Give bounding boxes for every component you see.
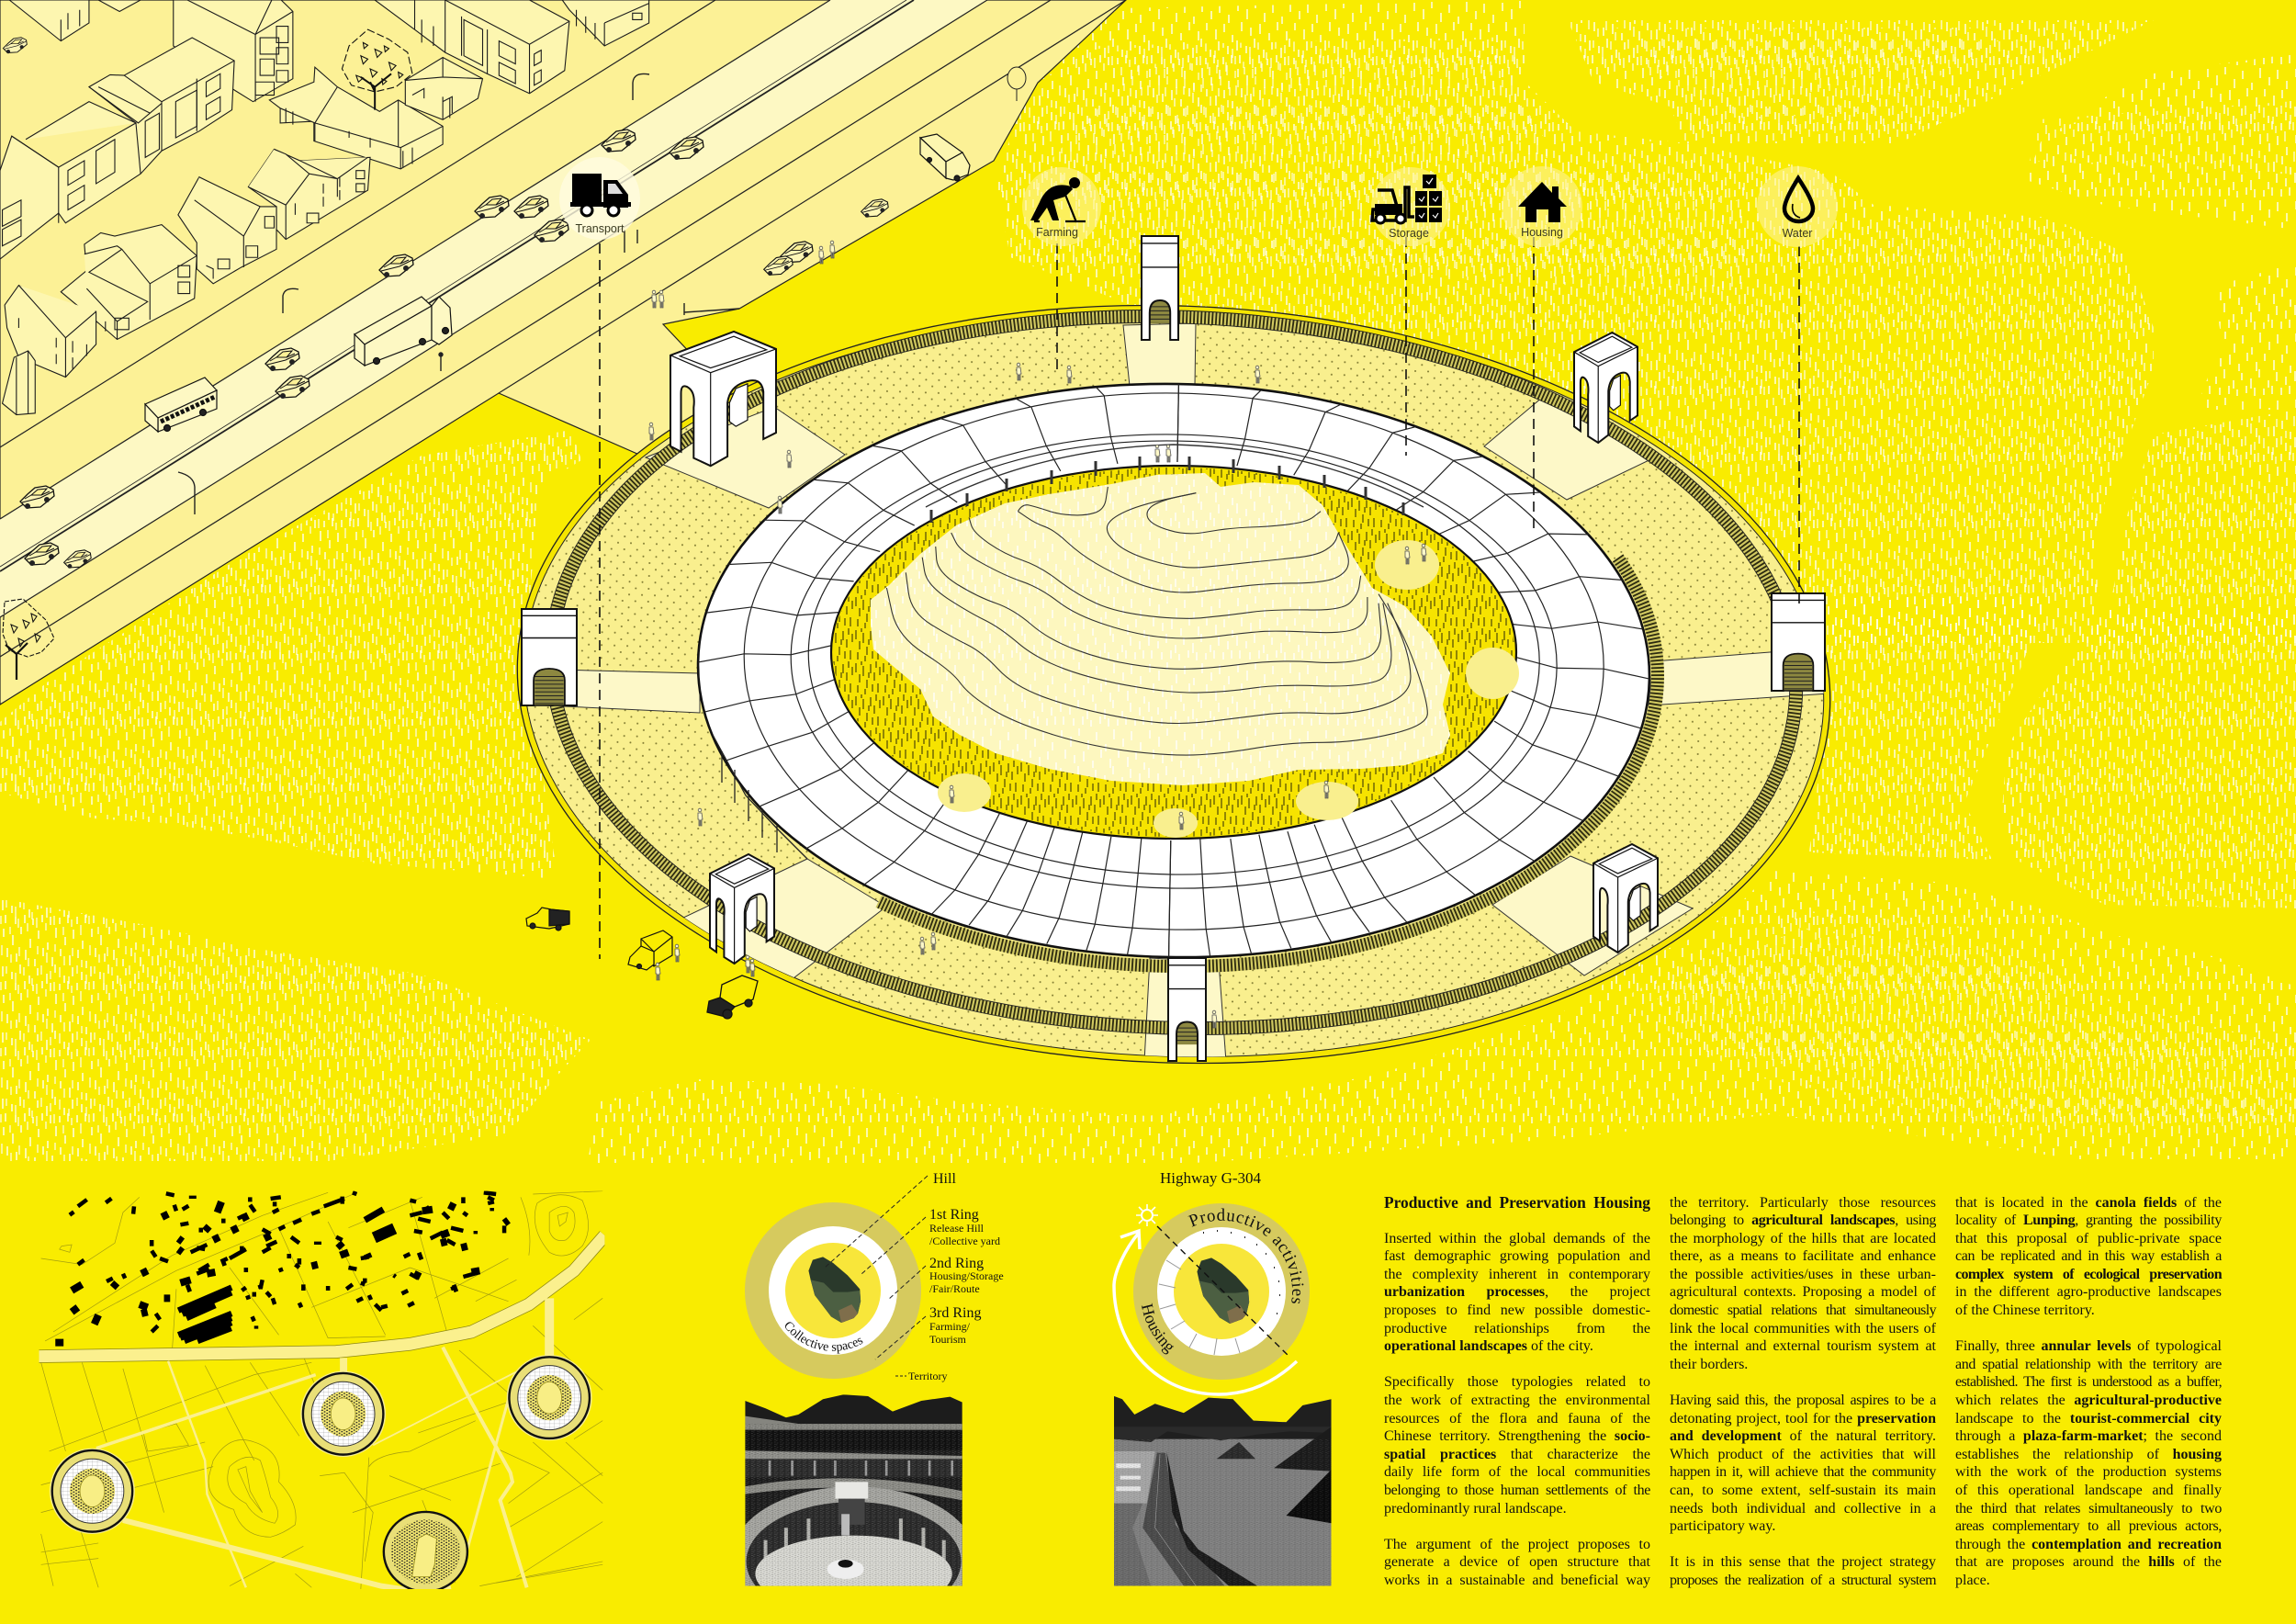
ring diagram: collective: [745, 1176, 928, 1379]
text column 3: that is located in the canola fields of the: [1955, 1194, 2222, 1211]
text column 2: proposes the realization of a structural system: [1670, 1573, 1936, 1588]
plazas between the fields: [523, 323, 1829, 1062]
meadow clearings: [938, 540, 1519, 838]
white grass field: central and upper area: [996, 0, 2296, 908]
ring diagram labels: 3rd Ring: [929, 1305, 981, 1321]
icon: storage: [1371, 167, 1450, 246]
text column 2: agricultural contexts. Proposing a model of: [1670, 1284, 1936, 1300]
arch gate: top: [1142, 236, 1178, 340]
text column 1: spatial practices that characterize the: [1384, 1447, 1650, 1462]
hatched outer ring site: [504, 283, 1843, 1086]
icon: water: [1757, 166, 1838, 247]
text column 1: resources of the flora and fauna of the: [1384, 1411, 1650, 1427]
text column 2: participatory way.: [1670, 1518, 1775, 1534]
arch gate: bottom right: [1593, 844, 1658, 953]
arch gate: left: [522, 609, 577, 705]
map buildings: [55, 1192, 509, 1343]
text column 3: locality of Lunping, granting the possibility: [1955, 1212, 2222, 1228]
photo: highway through karst valley: [1114, 1393, 1332, 1586]
text column 1: urbanization processes, the project: [1384, 1284, 1650, 1300]
field workers: [656, 944, 755, 980]
text column 3: areas complementary to all previous actors,: [1955, 1518, 2222, 1534]
pickup truck in the field: [526, 908, 569, 930]
ring diagram labels: Housing/Storage: [929, 1269, 1004, 1282]
icon: housing: [1502, 166, 1582, 247]
text column 2: Having said this, the proposal aspires to be a: [1670, 1393, 1936, 1408]
text column 2: Which product of the activities that will: [1670, 1447, 1936, 1462]
text column 1: predominantly rural landscape.: [1384, 1501, 1567, 1517]
text column 2: happen in it, will achieve that the community: [1670, 1464, 1936, 1480]
tree: small far: [1007, 67, 1026, 101]
yellow notch field figures: [652, 241, 835, 308]
row of houses: [0, 0, 649, 415]
map street network: [41, 1191, 602, 1589]
harvester: [707, 976, 758, 1019]
text column 3: complex system of ecological preservation: [1955, 1267, 2222, 1282]
text column 2: needs both individual and collective in a: [1670, 1501, 1936, 1517]
text column 3: establishes the relationship of housing: [1955, 1447, 2222, 1462]
hatched path ring: [533, 288, 1815, 1056]
text column 3: can be replicated and in this way establish a: [1955, 1248, 2222, 1264]
text column 1: operational landscapes of the city.: [1384, 1338, 1593, 1354]
icon: transport: Transport: [575, 222, 625, 235]
text column 1: productive relationships from the: [1384, 1321, 1650, 1336]
text column 3: the third that relates simultaneously to two: [1955, 1501, 2222, 1517]
white grass field: left: [0, 430, 591, 1161]
site plan map: [39, 1191, 604, 1593]
ring diagram labels: /Fair/Route: [929, 1282, 980, 1295]
text column 2: there, as a means to facilitate and enhance: [1670, 1248, 1936, 1264]
text column 2: the internal and external tourism system at: [1670, 1338, 1936, 1354]
ring diagram labels: 1st Ring: [929, 1207, 979, 1223]
meadow grass strokes: [833, 468, 1514, 837]
arch gate: top right: [1574, 333, 1638, 443]
roof panel divisions: [1169, 384, 1654, 965]
hill contour lines: [886, 487, 1427, 755]
icon: transport: [559, 157, 640, 240]
ring diagram labels: Farming/: [929, 1320, 971, 1333]
text column 3: of this operational landscape and finally: [1955, 1483, 2222, 1498]
text column 3: of the Chinese territory.: [1955, 1303, 2095, 1318]
text column 1: [1384, 1192, 1650, 1588]
ring diagram: productive: Productive activities: [1188, 1209, 1304, 1303]
neighbourhood ground plane: [0, 0, 1126, 705]
ring diagram labels: [895, 1171, 1004, 1382]
icon: storage: Storage: [1389, 227, 1429, 240]
bus: [145, 378, 217, 432]
text column 1: daily life form of the local communities: [1384, 1464, 1650, 1480]
text column 3: Finally, three annular levels of typological: [1955, 1338, 2222, 1354]
text column 3: through the contemplation and recreation: [1955, 1537, 2222, 1552]
text column 2: domestic spatial relations that simultaneously: [1670, 1303, 1936, 1318]
text column 3: through a plaza-farm-market; the second: [1955, 1428, 2222, 1444]
photo: round earthen building: [745, 1394, 962, 1586]
highway label: Highway G-304: [1160, 1169, 1262, 1187]
text column 2: their borders.: [1670, 1357, 1748, 1372]
text column 3: landscape to the tourist-commercial city: [1955, 1411, 2222, 1427]
street lamps: [178, 73, 739, 514]
arch gate: bottom: [1168, 958, 1206, 1061]
text column 2: link the local communities with the users of: [1670, 1321, 1936, 1336]
text column 2: can, to some extent, self-sustain its main: [1670, 1483, 1936, 1498]
roof eaves and columns: [926, 445, 1424, 523]
icon: water: Water: [1783, 227, 1812, 240]
text column 1: works in a sustainable and beneficial way: [1384, 1573, 1650, 1588]
inner hatched path under roof edge: [877, 545, 1660, 975]
text column 3: which relates the agricultural-productive: [1955, 1393, 2222, 1408]
tree: courtyard: [342, 29, 412, 110]
text column 1: Chinese territory. Strengthening the socio-: [1384, 1428, 1650, 1444]
tree: left edge: [3, 599, 54, 680]
arch gate: right: [1772, 593, 1825, 691]
text column 2: the morphology of the hills that are located: [1670, 1231, 1936, 1246]
white grass field: lower right and bottom: [588, 871, 2296, 1163]
ring diagram labels: /Collective yard: [929, 1235, 1000, 1247]
semi truck: [355, 297, 452, 366]
text column 1: belonging to those human settlements of the: [1384, 1483, 1650, 1498]
hill grass: [871, 473, 1450, 785]
text column 1: generate a device of open structure that: [1384, 1554, 1650, 1570]
text column 3: and spatial relationship with the territory are: [1955, 1357, 2222, 1372]
delivery truck by the road: [920, 134, 970, 181]
delivery truck in the field: [628, 930, 672, 970]
text column 1: Productive and Preservation Housing: [1384, 1192, 1650, 1211]
highway G-304: [0, 0, 1126, 657]
text column 3: in the different agro-productive landscapes: [1955, 1284, 2222, 1300]
ring diagram labels: Release Hill: [929, 1222, 985, 1235]
ring diagram labels: Tourism: [929, 1333, 966, 1346]
hill mass: [871, 473, 1450, 785]
text column 3: that are proposes around the hills of the: [1955, 1554, 2222, 1570]
text column 2: It is in this sense that the project strategy: [1670, 1554, 1936, 1570]
arch gate: bottom left: [710, 854, 774, 964]
ring diagram: productive: Housing: [1141, 1303, 1174, 1354]
text column 3: place.: [1955, 1573, 1990, 1588]
ring diagram labels: 2nd Ring: [929, 1256, 984, 1271]
ring roof: [693, 376, 1654, 965]
text column 3: that this proposal of public-private space: [1955, 1231, 2222, 1246]
text column 2: [1670, 1194, 1937, 1588]
ring diagram: collective: Collective spaces: [785, 1322, 863, 1354]
text column 1: The argument of the project proposes to: [1384, 1537, 1650, 1552]
text column 2: the territory. Particularly those resources: [1670, 1194, 1936, 1211]
icon: housing: Housing: [1521, 226, 1563, 239]
ring facade windows lower left: [713, 735, 807, 859]
icon: farming: Farming: [1036, 226, 1078, 239]
text column 1: the work of extracting the environmental: [1384, 1393, 1650, 1408]
ring diagram: productive: [1112, 1203, 1310, 1396]
text column 2: detonating project, tool for the preservation: [1670, 1411, 1936, 1427]
road vehicles: [3, 38, 888, 569]
arch gate: top left: [670, 332, 776, 466]
map rings: [50, 1355, 592, 1592]
icon: farming: [1022, 167, 1101, 246]
ring diagram labels: Territory: [908, 1370, 947, 1382]
text column 2: and development of the natural territory.: [1670, 1428, 1936, 1444]
text column 1: proposes to find new possible domestic-: [1384, 1303, 1650, 1318]
leader lines from icons: [600, 237, 1799, 959]
people on the ring: [649, 363, 1426, 1028]
text column 2: belonging to agricultural landscapes, using: [1670, 1212, 1936, 1228]
inner courtyard meadow: [831, 466, 1516, 839]
ring diagram labels: Hill: [933, 1171, 956, 1187]
text column 2: the possible activities/uses in these urban-: [1670, 1267, 1936, 1282]
text column 1: the complexity inherent in contemporary: [1384, 1267, 1650, 1282]
text column 3: [1955, 1194, 2223, 1588]
text column 3: with the work of the production systems: [1955, 1464, 2222, 1480]
text column 1: fast demographic growing population and: [1384, 1248, 1650, 1264]
text column 3: established. The first is understood as a buffer,: [1955, 1374, 2222, 1390]
map main road: [39, 1235, 604, 1593]
text column 1: Specifically those typologies related to: [1384, 1374, 1650, 1390]
text column 1: Inserted within the global demands of the: [1384, 1231, 1650, 1246]
